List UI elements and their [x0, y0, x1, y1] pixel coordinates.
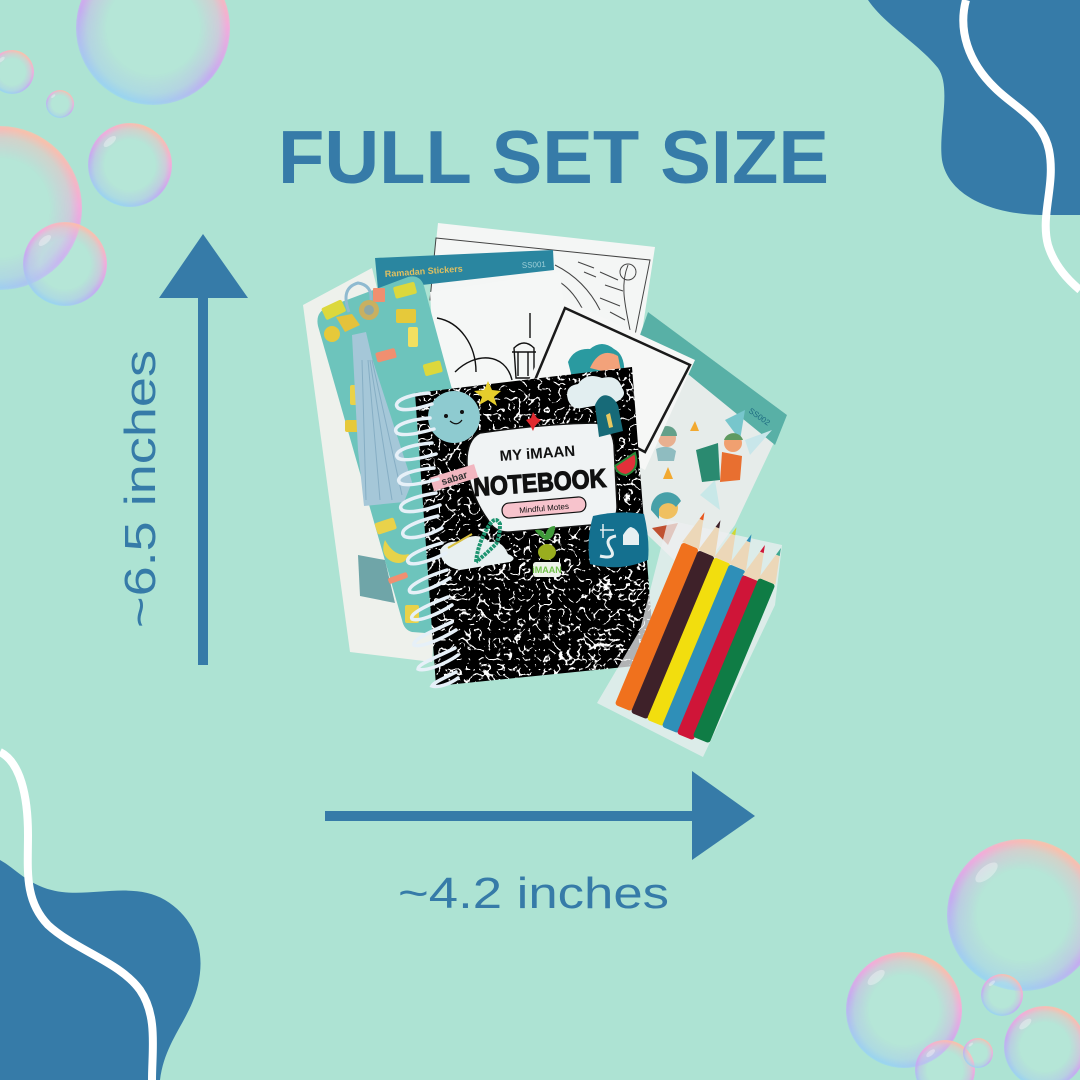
sticker packet: header: Ramadan Stickers [384, 264, 463, 279]
sticker: watermelon [615, 453, 636, 475]
sticker: sabar tag: sabar [440, 470, 469, 488]
bubbles: top left [0, 0, 230, 306]
notebook name: NOTEBOOK [472, 463, 607, 502]
sticker packet: right: Jannah [638, 338, 673, 368]
notebook title: MY iMAAN [499, 443, 576, 465]
sticker: cloud and tasbih [440, 520, 514, 570]
label: width: ~4.2 inches [398, 869, 669, 918]
girl sticker [651, 492, 681, 545]
label: height: ~6.5 inches [116, 350, 165, 628]
bookmark [317, 276, 520, 640]
pill: mindful motes [501, 496, 586, 519]
sticker packet: right [590, 312, 787, 580]
sticker: sprout and imaan tag [532, 526, 562, 577]
sticker: moon [428, 391, 480, 443]
sticker: cloud and lantern [567, 376, 624, 437]
sticker: star [474, 381, 501, 406]
sticker: blue path square [589, 512, 648, 567]
tassel [336, 283, 412, 506]
arrow: height [159, 234, 248, 665]
bubbles: bottom right [846, 839, 1080, 1080]
notebook cover texture [415, 367, 652, 685]
arrow: width [325, 771, 755, 860]
product photo: full set [303, 223, 789, 757]
title: FULL SET SIZE [278, 115, 829, 199]
coloring page [430, 223, 655, 345]
spiral binding [396, 393, 458, 687]
notebook [415, 367, 652, 685]
sticker: sabar tag [430, 464, 478, 491]
reading boy sticker [696, 433, 743, 482]
card with black frame [520, 300, 695, 470]
pencils [615, 509, 789, 743]
blob: top right corner [868, 0, 1080, 290]
notebook label [467, 423, 617, 532]
clear bag behind bookmark [303, 268, 440, 662]
sticker: red sparkle [526, 412, 541, 431]
pill: mindful motes: Mindful Motes [519, 502, 569, 515]
blob: bottom left corner [0, 752, 201, 1080]
sticker packet: right: SS002 [747, 406, 772, 428]
pencil pack [597, 509, 789, 757]
building sticker [568, 344, 624, 385]
kid sticker [656, 426, 677, 461]
sticker: sprout and imaan tag: iMAAN [532, 565, 562, 575]
sticker packet: header: SS001 [522, 260, 547, 270]
sticker packet: header [375, 250, 580, 470]
